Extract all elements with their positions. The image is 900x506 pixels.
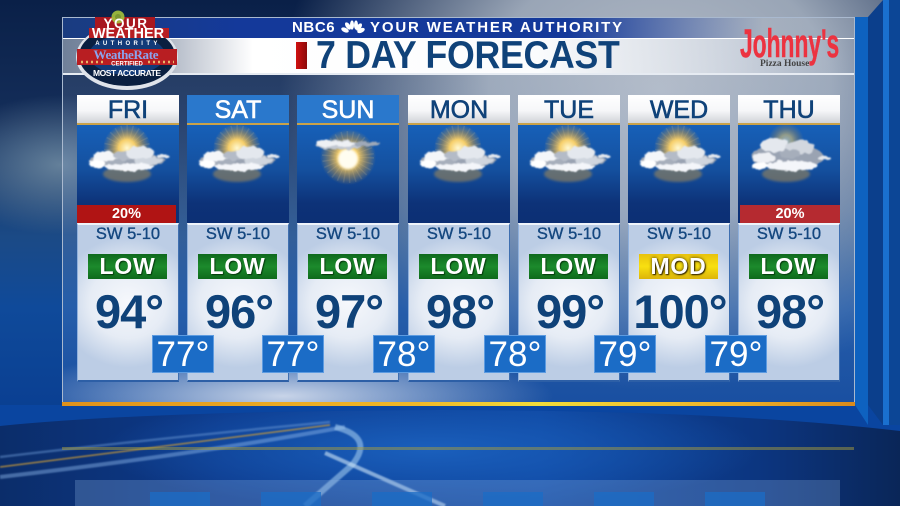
day header [518, 95, 620, 125]
day header [187, 95, 289, 125]
high temperature: 97° [315, 285, 383, 338]
day header: SUN [322, 96, 374, 124]
low temperature: Mon night: 78° [489, 335, 541, 374]
air quality badge [198, 254, 277, 279]
badge wording: WeatheRate [94, 47, 159, 62]
day header [297, 95, 399, 125]
weather image panel [77, 125, 179, 223]
lower panel [408, 223, 510, 382]
right blue pillar [855, 0, 900, 425]
high temperature: 94° [95, 285, 163, 338]
wind: SW 5-10 [316, 225, 380, 243]
high temperature: 100° [633, 285, 727, 338]
rain chance [77, 205, 176, 223]
rain chance: 20% [775, 206, 805, 222]
column: Tuesday [518, 95, 620, 382]
day header: FRI [108, 96, 148, 124]
icon: NBC peacock [341, 20, 365, 34]
air quality badge: LOW [430, 253, 487, 279]
weather image panel [408, 125, 510, 223]
wind: SW 5-10 [96, 225, 160, 243]
lower panel [628, 223, 730, 382]
lower panel [518, 223, 620, 382]
wind: SW 5-10 [647, 225, 711, 243]
day header: SAT [215, 96, 261, 124]
wind: SW 5-10 [537, 225, 601, 243]
column: Sunday [297, 95, 399, 382]
badge wording [92, 16, 165, 78]
low temperature: Sun night: 78° [378, 335, 430, 374]
lower panel [77, 223, 179, 382]
badge wording: WEATHER [92, 26, 165, 42]
wind: SW 5-10 [757, 225, 821, 243]
weather image panel [187, 125, 289, 223]
wind: SW 5-10 [206, 225, 270, 243]
lower panel [187, 223, 289, 382]
high temperature: 98° [426, 285, 494, 338]
column: Friday [77, 95, 179, 382]
day header [408, 95, 510, 125]
title marker [296, 42, 307, 69]
day header: MON [430, 96, 488, 124]
air quality badge [529, 254, 608, 279]
logo: Johnny's Pizza House [740, 22, 839, 69]
air quality badge: LOW [99, 253, 156, 279]
column: Wednesday [628, 95, 730, 382]
day header: THU [763, 96, 815, 124]
badge wording: YOUR [103, 16, 149, 31]
main translucent panel [62, 17, 855, 405]
background: lower blue floor with light streaks [0, 405, 900, 506]
title bar [63, 38, 854, 75]
air quality badge: MOD [650, 253, 707, 279]
low temperature: Wed night: 79° [710, 335, 762, 374]
high temperature: 98° [756, 285, 824, 338]
column: Monday [408, 95, 510, 382]
air quality badge: LOW [209, 253, 266, 279]
badge: Your Weather Authority WeatheRate certified [76, 10, 178, 90]
badge wording: AUTHORITY [95, 41, 161, 47]
low temperature: Tue night: 79° [599, 335, 651, 374]
air quality badge: LOW [540, 253, 597, 279]
air quality badge: LOW [760, 253, 817, 279]
air quality badge [639, 254, 718, 279]
weather image panel [738, 125, 840, 223]
weather image panel [628, 125, 730, 223]
lower panel [738, 223, 840, 382]
column: Thursday [738, 95, 840, 382]
air quality badge [419, 254, 498, 279]
air quality badge: LOW [319, 253, 376, 279]
gold base line [62, 402, 855, 406]
logo tagline: Pizza House [760, 59, 809, 69]
title: 7 DAY FORECAST [316, 34, 620, 77]
badge wording: MOST ACCURATE [93, 68, 161, 78]
weather image panel [297, 125, 399, 223]
day header [77, 95, 179, 125]
day header: TUE [544, 96, 594, 124]
day header [738, 95, 840, 125]
air quality badge [308, 254, 387, 279]
badge wording: CERTIFIED [111, 62, 143, 68]
wind: SW 5-10 [427, 225, 491, 243]
air quality badge [749, 254, 828, 279]
low temperature: Fri night: 77° [157, 335, 209, 374]
column: Saturday [187, 95, 289, 382]
station name: NBC6 [292, 19, 335, 36]
rain chance: 20% [112, 206, 141, 222]
air quality badge [88, 254, 167, 279]
logo wordmark: Johnny's [740, 22, 839, 66]
lower panel [297, 223, 399, 382]
slogan: YOUR WEATHER AUTHORITY [370, 19, 624, 36]
weather image panel [518, 125, 620, 223]
rain chance [740, 205, 840, 223]
day header: WED [650, 96, 708, 124]
high temperature: 96° [205, 285, 273, 338]
low temperature: Sat night: 77° [267, 335, 319, 374]
day header [628, 95, 730, 125]
high temperature: 99° [536, 285, 604, 338]
top banner: NBC6 Your Weather Authority [63, 18, 763, 38]
